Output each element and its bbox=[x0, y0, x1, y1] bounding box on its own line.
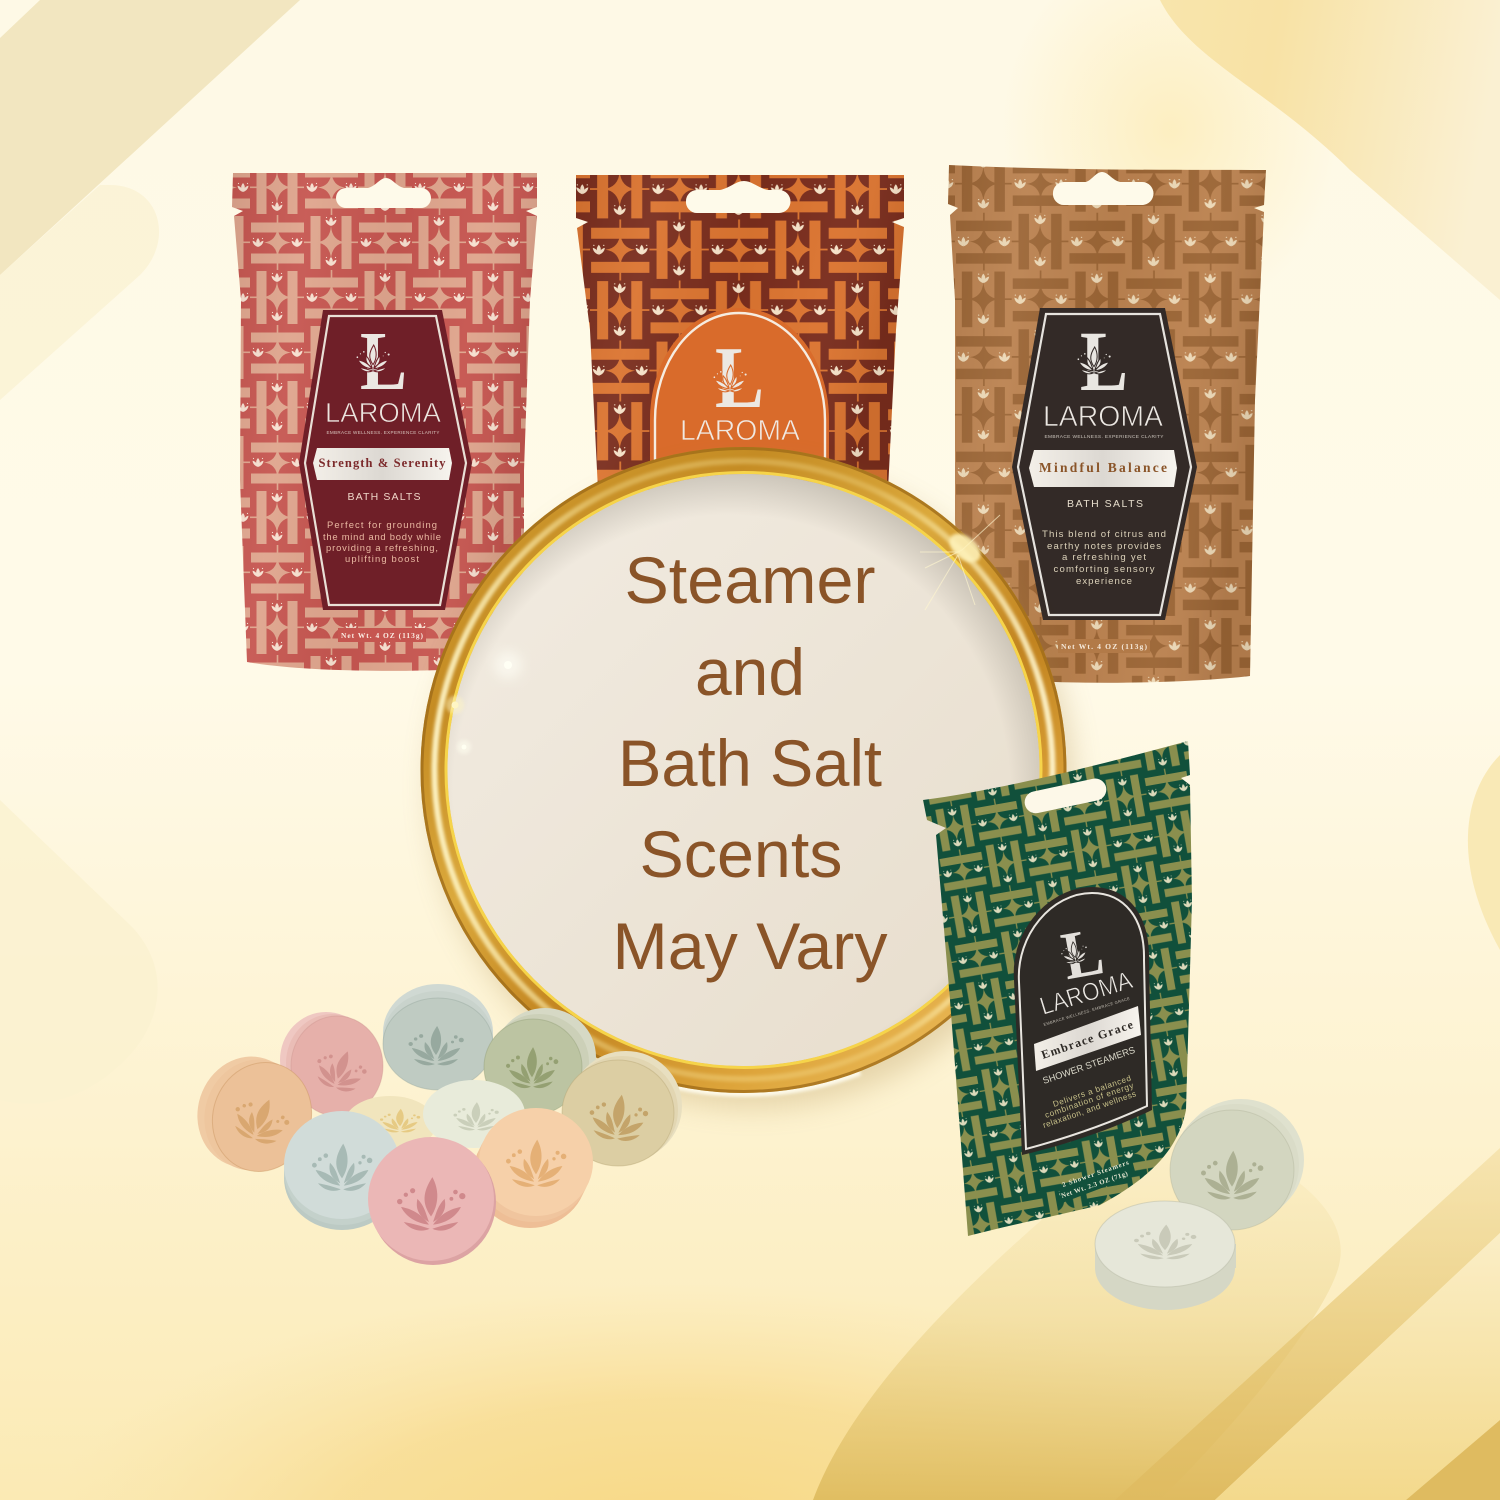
tablet: pink front bbox=[368, 1137, 496, 1265]
tablet: light blue bbox=[284, 1111, 400, 1230]
pouch: Strength & Serenity bath salts (red): Strength & Serenity bbox=[318, 456, 446, 470]
pouch: Strength & Serenity bath salts (red): uplifting boost bbox=[345, 553, 419, 564]
tablet: cream back bbox=[344, 1096, 436, 1152]
pouch: orange bath salts bbox=[576, 175, 904, 490]
shower steamer tablets: left pile bbox=[183, 984, 682, 1265]
tablet: peach left bbox=[183, 1043, 326, 1184]
pouch: Strength & Serenity bath salts (red): LAROMA bbox=[325, 397, 441, 428]
pouch: Strength & Serenity bath salts (red): EMBRACE WELLNESS. EXPERIENCE CLARITY bbox=[326, 430, 440, 435]
pouch: Strength & Serenity bath salts (red): providing a refreshing, bbox=[326, 542, 438, 553]
pouch: orange bath salts: L bbox=[715, 330, 764, 427]
pouch: Embrace Grace shower steamers (green): 2 Shower Steamers bbox=[1061, 1159, 1130, 1189]
pouch: Mindful Balance bath salts (brown): comforting sensory bbox=[1054, 564, 1155, 575]
pouch: Embrace Grace shower steamers (green): LAROMA bbox=[1037, 966, 1136, 1021]
tablet: blue-green top bbox=[383, 984, 493, 1090]
pouch: Mindful Balance bath salts (brown): earthy notes provides bbox=[1047, 541, 1161, 552]
pouch: Embrace Grace shower steamers (green): combination of energy bbox=[1044, 1081, 1135, 1120]
pouch: Mindful Balance bath salts (brown): experience bbox=[1076, 576, 1132, 587]
pouch: Strength & Serenity bath salts (red): the mind and body while bbox=[323, 531, 441, 542]
pouch: Embrace Grace shower steamers (green): relaxation, and wellness bbox=[1042, 1089, 1137, 1130]
tablet: peach right bbox=[473, 1108, 593, 1228]
ring caption text: and bbox=[695, 635, 805, 709]
pouch: orange bath salts: LAROMA bbox=[680, 415, 801, 447]
gold ring frame bbox=[422, 448, 1074, 1108]
pouch: Mindful Balance bath salts (brown): EMBRACE WELLNESS. EXPERIENCE CLARITY bbox=[1044, 434, 1164, 440]
tablet: lying white bbox=[1095, 1201, 1236, 1310]
pouch: Embrace Grace shower steamers (green) bbox=[923, 741, 1192, 1236]
tablet: pale green-white bbox=[423, 1080, 525, 1148]
ring caption text: Scents bbox=[640, 817, 842, 891]
tablet: standing sage bbox=[1170, 1099, 1304, 1230]
pouch: Mindful Balance bath salts (brown): a refreshing yet bbox=[1062, 552, 1146, 563]
pouch: Embrace Grace shower steamers (green): Delivers a balanced bbox=[1052, 1074, 1133, 1109]
sparkles on ring bbox=[446, 515, 1000, 754]
pouch: Embrace Grace shower steamers (green): L bbox=[1056, 912, 1109, 994]
pouch: Mindful Balance bath salts (brown): L bbox=[1080, 313, 1128, 409]
tablet: pink back bbox=[280, 1012, 383, 1116]
pouch: Strength & Serenity bath salts (red) bbox=[232, 173, 537, 671]
ring caption text: May Vary bbox=[612, 909, 888, 983]
pouch: Embrace Grace shower steamers (green): Net Wt. 2.3 OZ (71g) bbox=[1060, 1170, 1129, 1200]
shower steamer tablets: right pair bbox=[1095, 1099, 1304, 1310]
ring caption text bbox=[612, 543, 888, 983]
ring caption text: Steamer bbox=[624, 543, 876, 617]
pouch: Mindful Balance bath salts (brown): BATH SALTS bbox=[1067, 498, 1143, 510]
pouch: Mindful Balance bath salts (brown) bbox=[948, 165, 1266, 683]
pouch: Embrace Grace shower steamers (green): SHOWER STEAMERS bbox=[1041, 1044, 1136, 1086]
pouch: Embrace Grace shower steamers (green): EMBRACE WELLNESS. EMBRACE GRACE bbox=[1043, 996, 1131, 1027]
pouch: Mindful Balance bath salts (brown): Net Wt. 4 OZ (113g) bbox=[1061, 642, 1147, 651]
pouch: Strength & Serenity bath salts (red): Net Wt. 4 OZ (113g) bbox=[341, 631, 424, 640]
ring caption text: Bath Salt bbox=[618, 726, 882, 800]
pouch: Embrace Grace shower steamers (green): Embrace Grace bbox=[1039, 1017, 1135, 1062]
pouch: Strength & Serenity bath salts (red): L bbox=[360, 315, 407, 408]
pouch: Strength & Serenity bath salts (red): BATH SALTS bbox=[348, 491, 420, 503]
pouch: Mindful Balance bath salts (brown): This blend of citrus and bbox=[1042, 529, 1166, 540]
pouch: Mindful Balance bath salts (brown): LAROMA bbox=[1043, 401, 1164, 433]
pouch: Strength & Serenity bath salts (red): Perfect for grounding bbox=[327, 519, 437, 530]
pouch: Mindful Balance bath salts (brown): Mindful Balance bbox=[1039, 460, 1167, 475]
tablet: olive bbox=[484, 1008, 596, 1115]
tablet: tan right bbox=[562, 1051, 682, 1166]
